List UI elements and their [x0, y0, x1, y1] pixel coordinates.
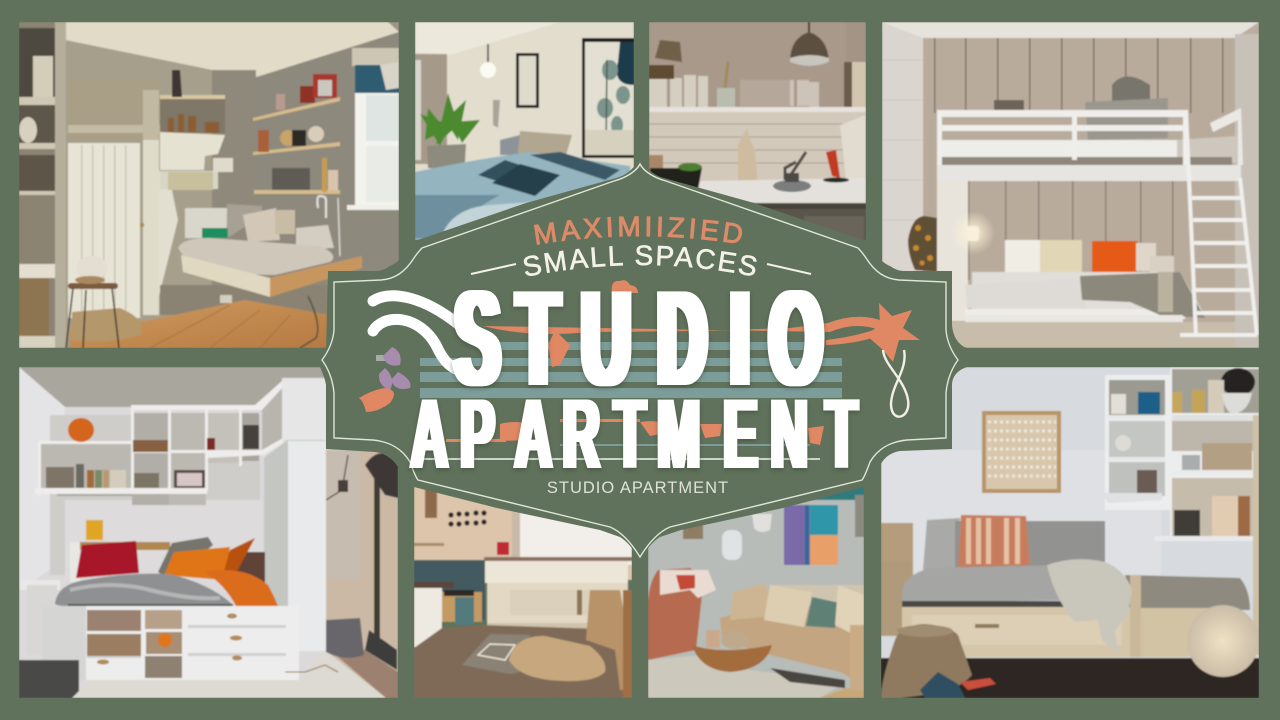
plant [420, 93, 480, 146]
dark floor [881, 658, 1259, 698]
seat [902, 565, 1100, 602]
bin and shelf [414, 585, 442, 647]
lamp and side table [881, 523, 913, 561]
tile wall [649, 112, 866, 187]
shelves left [1105, 375, 1170, 510]
lamp [808, 22, 810, 36]
window [352, 48, 399, 66]
small framed print [516, 53, 539, 108]
lamp glow [959, 214, 992, 252]
heading: studio: STUDIO [454, 262, 822, 414]
counter and cabinets [484, 557, 632, 561]
subheading: studio apartment: STUDIO APARTMENT [547, 479, 729, 497]
orange shapes behind apartment [420, 419, 824, 460]
floral sprig [359, 347, 410, 412]
woven pouf [881, 624, 972, 698]
chair [586, 590, 630, 690]
panel: bedroom photo [415, 22, 634, 240]
shelving unit [56, 494, 132, 496]
loft bed [1175, 136, 1240, 163]
headboard [70, 542, 170, 550]
heading: apartment: APARTMENT [411, 379, 857, 489]
white swirls [373, 296, 458, 370]
floor [70, 300, 330, 348]
panel: living room photo [648, 480, 864, 698]
wall shelves [253, 97, 340, 121]
mirror and loft cushion [1112, 76, 1150, 103]
glowing globe lamp [1187, 605, 1259, 677]
heading: maximized: MAXIMIIZIED [534, 216, 742, 245]
lower bed [972, 272, 1202, 310]
wardrobe [282, 378, 326, 440]
yellow note [86, 520, 103, 540]
wall art [982, 411, 1061, 493]
shelves right [1170, 367, 1259, 540]
daybed [185, 208, 227, 238]
wall under [160, 285, 330, 315]
large botanical print [582, 38, 634, 158]
badge shape [320, 158, 967, 562]
panel: daybed photo [881, 367, 1259, 698]
floor [414, 625, 632, 700]
orange ribbon with star [483, 280, 920, 367]
books and shelf items [649, 75, 708, 108]
pillows [500, 135, 520, 155]
badge inner outline [322, 164, 958, 557]
mattress [55, 574, 232, 606]
lower wall post [937, 181, 968, 321]
rug [462, 634, 530, 674]
central badge [320, 162, 967, 558]
teal stripes [420, 342, 842, 398]
laundry basket [326, 618, 364, 658]
armchair [648, 568, 702, 660]
basket [692, 645, 772, 672]
door [68, 78, 160, 140]
bottle [738, 128, 758, 183]
shelf [649, 107, 866, 112]
back cushions [923, 518, 960, 570]
panel: storage bed photo [19, 367, 398, 698]
bed [415, 152, 634, 240]
base drawers [902, 601, 1137, 609]
decorative dashes [471, 264, 811, 274]
throw blanket [1047, 559, 1132, 655]
sofa [720, 607, 864, 685]
floor [923, 322, 1235, 348]
floor and rug [19, 660, 79, 698]
right room [326, 450, 398, 698]
panel: reading nook photo [19, 22, 399, 348]
counter [697, 178, 866, 204]
storage drawers [42, 606, 299, 680]
stool and basket [72, 308, 142, 342]
ladder [1180, 110, 1257, 337]
pillows [76, 541, 139, 578]
abstract painting [784, 505, 838, 565]
panel: loft bed photo [882, 22, 1259, 348]
cupboard with drawers [160, 97, 225, 133]
lower pillows [1005, 240, 1042, 273]
glasses and vase [790, 80, 820, 108]
rug [648, 655, 845, 698]
blanket [205, 570, 283, 636]
white loop ornament [883, 350, 908, 417]
panel: kitchen and rug photo [414, 480, 632, 700]
scattered fabric [920, 672, 965, 698]
pendant [487, 44, 489, 62]
cabinets [771, 208, 866, 240]
heading: small spaces: SMALL SPACES [524, 245, 757, 276]
panel: kitchenette photo [649, 22, 866, 240]
right bench [1125, 575, 1250, 610]
flowers [908, 216, 937, 272]
